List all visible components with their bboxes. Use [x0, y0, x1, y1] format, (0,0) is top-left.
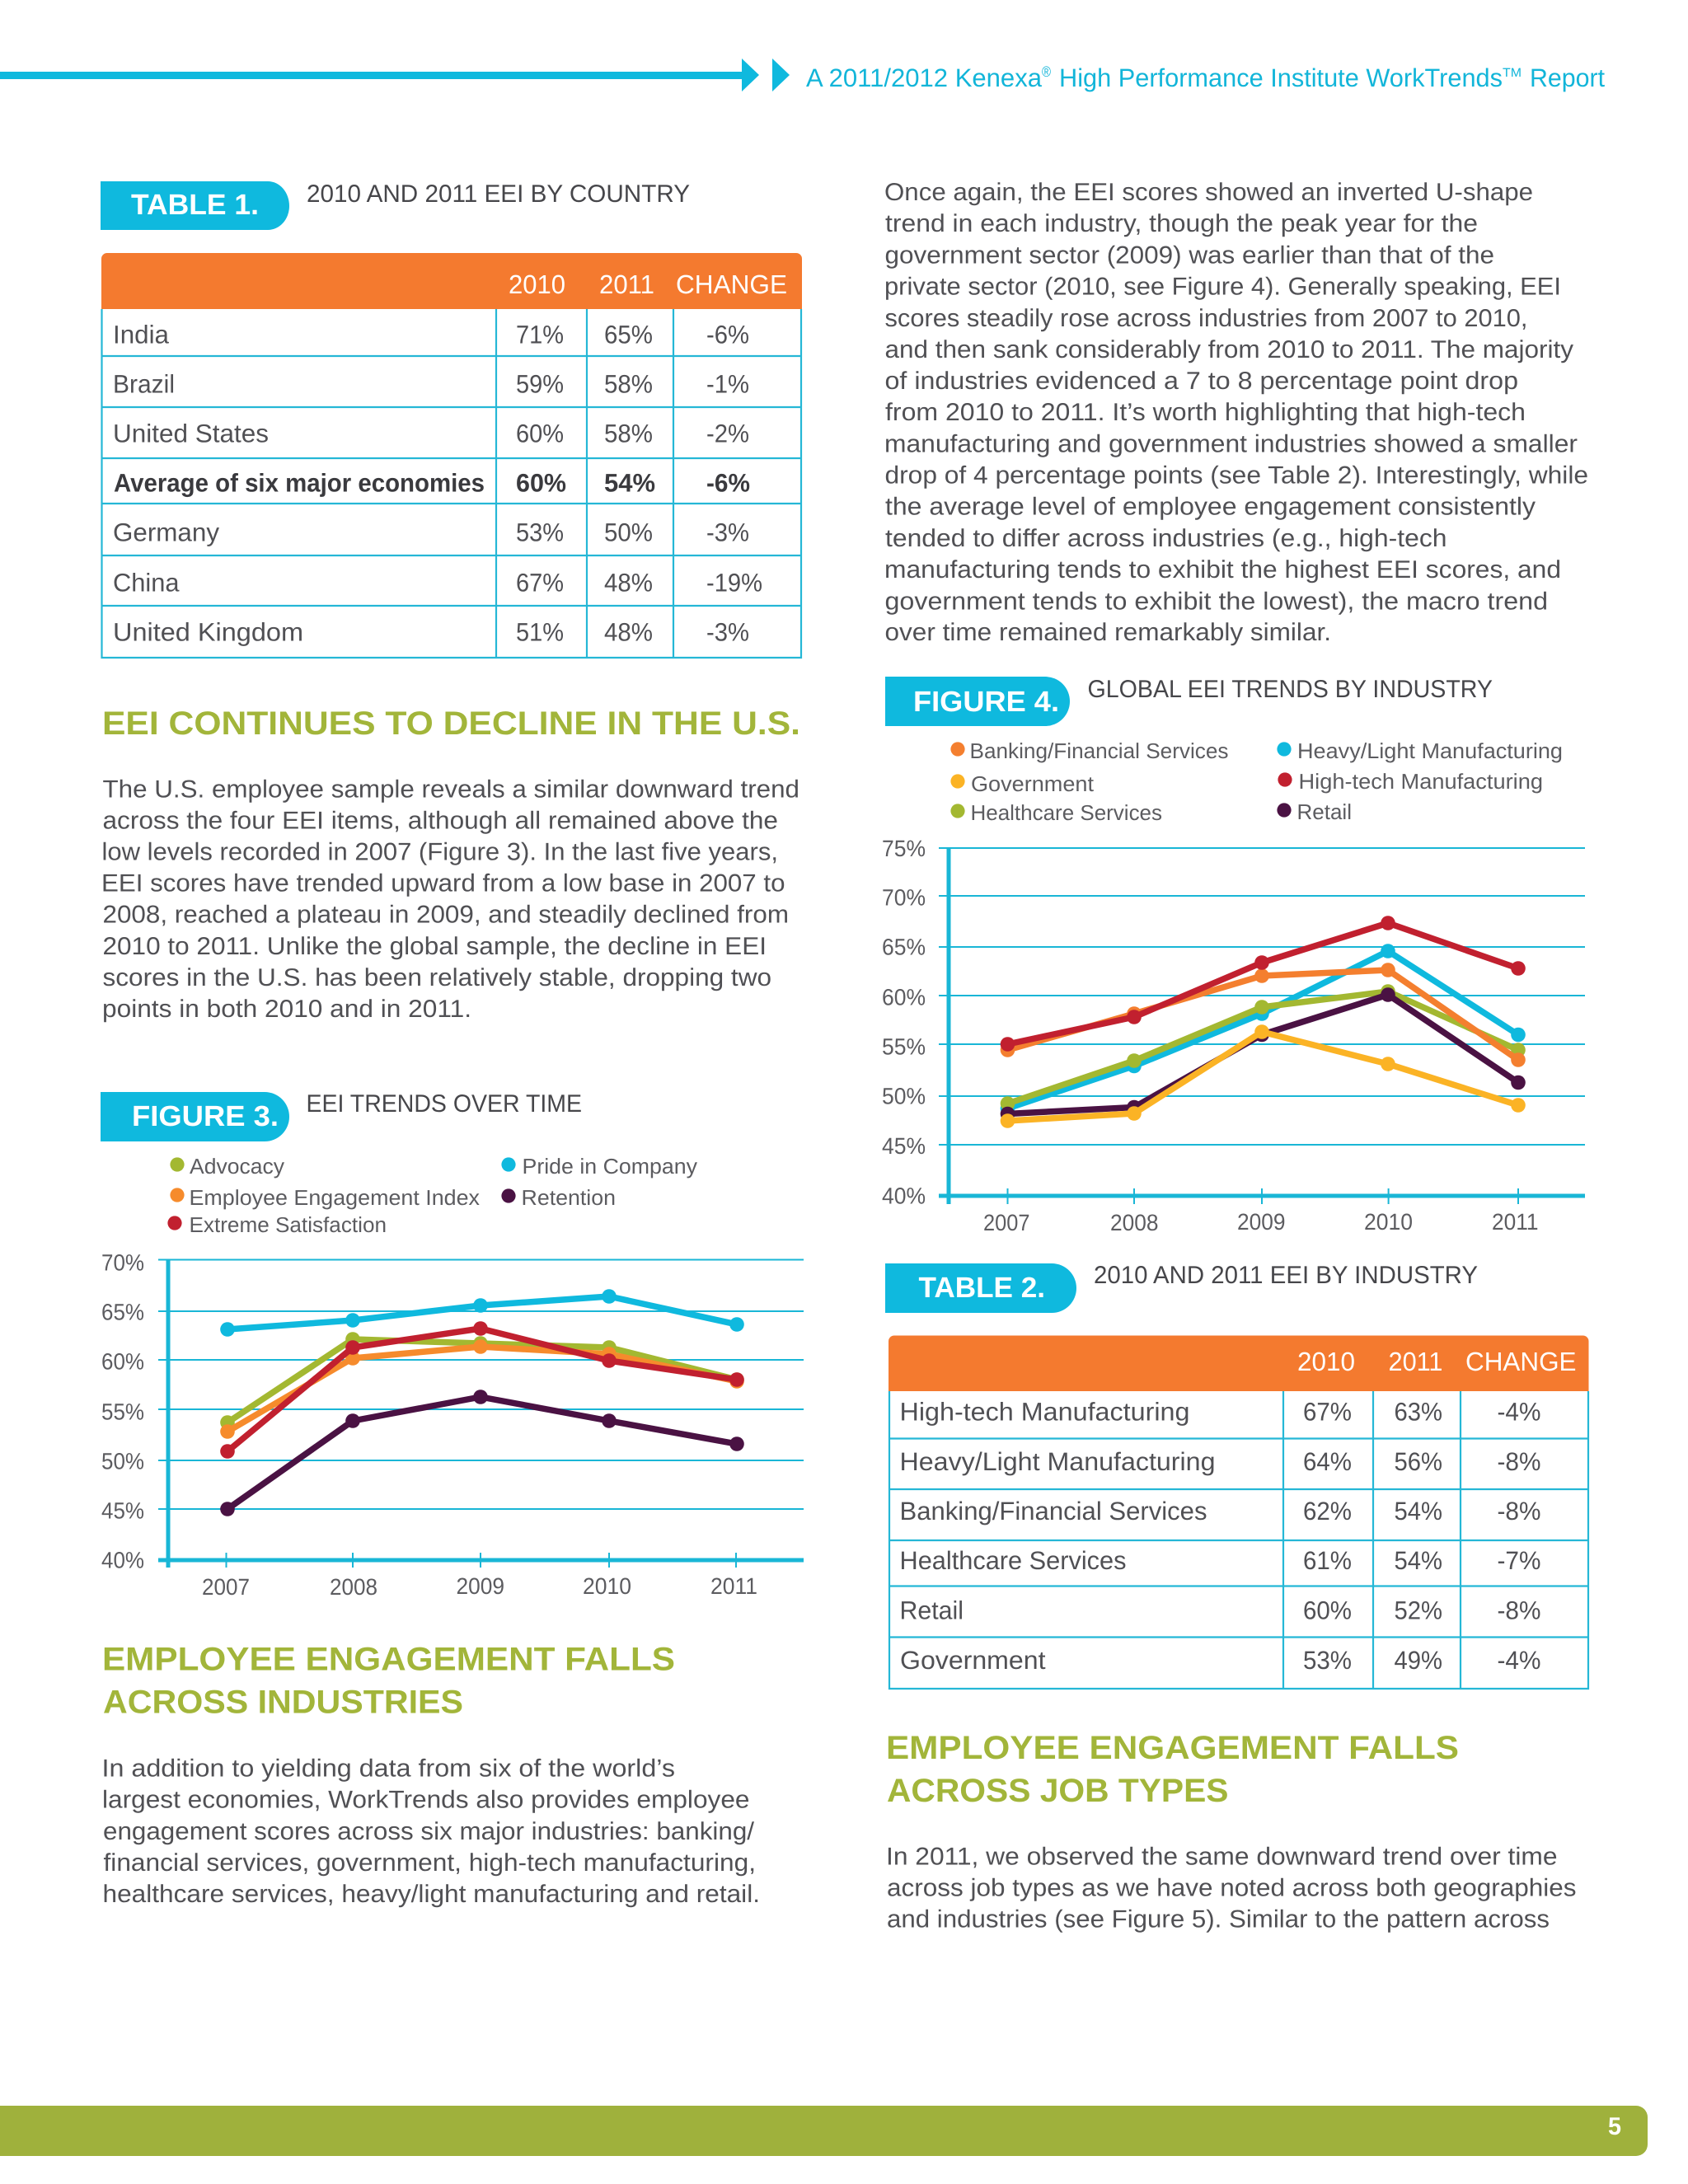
table 1 rows — [113, 320, 762, 646]
figure 4 badge — [885, 677, 1070, 726]
text block: inverted U-shape: government tends to exhibit the lowest), the macro trend — [885, 588, 1548, 615]
page number: 5 — [1608, 2113, 1621, 2140]
heading: falls across industries — [102, 1642, 675, 1721]
text block: U.S. sample: low levels recorded in 2007 (Figure 3). In the last five years, — [102, 839, 778, 865]
table 1 rows: United States — [113, 419, 269, 448]
table 1 rows: Average of six major economies — [114, 468, 485, 498]
figure 4 y axis labels: 75% — [882, 836, 926, 861]
table 1 rows: 71% — [516, 320, 564, 349]
table 2 rows: 49% — [1395, 1646, 1442, 1675]
figure 4 y axis labels: 45% — [882, 1133, 926, 1159]
text block: inverted U-shape: trend in each industry, though the peak year for the — [885, 210, 1478, 237]
figure 4 y axis labels: 70% — [882, 885, 926, 910]
series: Extreme Satisfaction — [220, 1321, 744, 1459]
figure 4 legend — [950, 738, 1563, 825]
table 1 badge: TABLE 1. — [131, 189, 259, 221]
table 1 rows: 50% — [604, 518, 653, 547]
table 2 rows: 62% — [1303, 1497, 1352, 1526]
figure 4 legend: Healthcare Services — [971, 800, 1162, 825]
series: Healthcare Services — [1001, 984, 1526, 1111]
table 2 grid — [889, 1391, 1588, 1689]
figure 3 badge — [101, 1092, 289, 1141]
table 2 rows: -8% — [1497, 1497, 1541, 1526]
figure 4 y axis labels: 60% — [882, 984, 926, 1010]
text block: inverted U-shape: Once again, the EEI scores showed an inverted U-shape — [884, 179, 1533, 206]
figure 3 legend: Retention — [521, 1185, 616, 1210]
table 1 grid — [102, 309, 801, 658]
text block: inverted U-shape: government sector (2009) was earlier than that of the — [885, 242, 1494, 269]
text block: industries: engagement scores across six major industries: banking/ — [103, 1818, 755, 1845]
header arrow bar — [0, 59, 790, 91]
text block: U.S. sample — [101, 776, 799, 1023]
line chart series: figure 3 — [220, 1289, 744, 1516]
table 1 rows: -3% — [706, 618, 749, 646]
figure 4 x axis labels: 2011 — [1492, 1209, 1538, 1235]
figure 4 legend: Retail — [1297, 799, 1352, 824]
table 2 rows: -8% — [1497, 1596, 1541, 1625]
text block: U.S. sample: scores in the U.S. has been relatively stable, dropping two — [102, 964, 771, 991]
table 1 rows: 60% — [516, 419, 564, 448]
figure 4 y axis labels: 65% — [882, 935, 926, 959]
table 2 rows: 63% — [1395, 1398, 1442, 1426]
panel: figure 3 — [101, 1090, 804, 1600]
figure 3 badge: FIGURE 3. — [132, 1100, 279, 1132]
series: Heavy/Light Manufacturing — [1001, 944, 1526, 1116]
figure 3 axes and grid — [158, 1259, 804, 1568]
report title: Report — [1530, 63, 1605, 92]
table 2 rows: 52% — [1395, 1596, 1442, 1625]
panel: table 2 — [885, 1262, 1589, 1689]
figure 4 y axis labels — [882, 836, 926, 1208]
table 1 rows: 48% — [604, 618, 653, 646]
table 2 rows: Heavy/Light Manufacturing — [900, 1447, 1215, 1476]
table 2 rows — [900, 1398, 1541, 1675]
table 2 badge — [885, 1263, 1076, 1313]
report title: TM — [1503, 66, 1522, 80]
series: Employee Engagement Index — [220, 1339, 744, 1439]
table 1 rows: 53% — [516, 518, 564, 547]
text block: U.S. sample: 2008, reached a plateau in 2009, and steadily declined from — [102, 902, 789, 928]
table 2 rows: -8% — [1497, 1447, 1541, 1476]
table 2 rows: 56% — [1395, 1447, 1442, 1476]
table 2 rows: Banking/Financial Services — [900, 1497, 1207, 1526]
figure 4 badge: FIGURE 4. — [913, 686, 1059, 718]
table 2 header row — [889, 1335, 1589, 1391]
table 1 rows: -6% — [706, 320, 749, 349]
text block: inverted U-shape: private sector (2010, see Figure 4). Generally speaking, EEI — [884, 274, 1561, 300]
table 2 rows: 64% — [1303, 1447, 1352, 1476]
series: Retention — [220, 1390, 744, 1516]
figure 4 legend: Banking/Financial Services — [969, 738, 1228, 763]
figure 3 legend: Advocacy — [190, 1154, 284, 1179]
figure 3 x axis labels: 2010 — [583, 1573, 631, 1599]
figure 4 y axis labels: 40% — [882, 1183, 926, 1208]
report title: High Performance Institute WorkTrends — [1059, 63, 1503, 92]
series: Advocacy — [220, 1332, 744, 1430]
text block: U.S. sample: points in both 2010 and in 2011. — [102, 996, 471, 1023]
panel: figure 4 — [882, 676, 1585, 1235]
heading: falls across job types — [886, 1730, 1459, 1809]
table 2 title: 2010 AND 2011 EEI BY INDUSTRY — [1094, 1262, 1478, 1289]
table 2 rows: Retail — [900, 1596, 964, 1625]
table 1 header row: 2011 — [599, 269, 654, 299]
table 1 rows: 59% — [516, 369, 564, 399]
figure 4 title: GLOBAL EEI TRENDS BY INDUSTRY — [1088, 676, 1493, 703]
table 2 rows: 61% — [1303, 1546, 1352, 1575]
table 1 badge — [101, 181, 289, 230]
figure 4 legend: Heavy/Light Manufacturing — [1297, 738, 1563, 763]
table 1 header row: CHANGE — [676, 269, 787, 299]
table 1 header row: 2010 — [509, 269, 565, 299]
table 2 rows: High-tech Manufacturing — [900, 1398, 1190, 1426]
figure 3 y axis labels: 40% — [101, 1548, 144, 1572]
heading: falls across industries: EMPLOYEE ENGAGEMENT FALLS — [102, 1642, 675, 1678]
text block: inverted U-shape — [884, 179, 1588, 646]
figure 3 x axis labels: 2008 — [330, 1574, 377, 1600]
series: Pride in Company — [220, 1289, 744, 1337]
text block: U.S. sample: The U.S. employee sample reveals a similar downward trend — [102, 776, 799, 803]
figure 4 axes and grid — [939, 848, 1585, 1204]
figure 3 legend — [167, 1154, 697, 1237]
panel: table 1 — [101, 180, 802, 658]
text block: industries: In addition to yielding data from six of the world’s — [102, 1755, 675, 1782]
text block: inverted U-shape: scores steadily rose across industries from 2007 to 2010, — [885, 305, 1528, 332]
table 1 rows: Brazil — [113, 369, 175, 399]
table 1 rows: 67% — [516, 569, 564, 597]
table 2 rows: -7% — [1497, 1546, 1541, 1575]
text block: industries — [102, 1755, 760, 1908]
table 2 rows: -4% — [1497, 1398, 1541, 1426]
table 2 rows: Government — [900, 1646, 1046, 1675]
figure 4 x axis labels: 2008 — [1110, 1210, 1159, 1235]
table 1 header row — [101, 253, 802, 309]
figure 3 title: EEI TRENDS OVER TIME — [307, 1090, 582, 1118]
table 1 rows: 65% — [604, 320, 653, 349]
table 1 rows: United Kingdom — [113, 618, 303, 646]
table 1 rows: 60% — [516, 468, 566, 498]
text block: inverted U-shape: over time remained remarkably similar. — [885, 619, 1331, 646]
text block: inverted U-shape: tended to differ across industries (e.g., high-tech — [885, 525, 1447, 552]
figure 4 y axis labels: 55% — [882, 1033, 926, 1060]
heading: EEI continues to decline: EEI CONTINUES TO DECLINE IN THE U.S. — [102, 705, 800, 742]
figure 3 y axis labels — [101, 1249, 144, 1572]
figure 4 x axis labels: 2010 — [1364, 1209, 1413, 1235]
table 1 rows: -3% — [706, 518, 749, 547]
line chart series: figure 4 — [1001, 916, 1526, 1128]
text block: industries: financial services, government, high-tech manufacturing, — [104, 1849, 756, 1877]
text block: industries: largest economies, WorkTrends also provides employee — [102, 1787, 750, 1813]
figure 3 y axis labels: 50% — [101, 1449, 144, 1474]
table 2 rows: 53% — [1303, 1646, 1352, 1675]
table 1 rows: 54% — [604, 468, 655, 498]
table 2 rows: 54% — [1395, 1546, 1442, 1575]
figure 3 x axis labels: 2011 — [710, 1573, 757, 1599]
text block: inverted U-shape: and then sank considerably from 2010 to 2011. The majority — [885, 336, 1573, 363]
table 2 badge: TABLE 2. — [918, 1272, 1045, 1304]
figure 4 x axis labels — [983, 1209, 1538, 1235]
report title — [806, 63, 1605, 92]
table 1 rows: -6% — [706, 468, 750, 498]
text block: U.S. sample: EEI scores have trended upward from a low base in 2007 to — [101, 870, 785, 897]
figure 4 legend: Government — [971, 771, 1095, 796]
figure 3 y axis labels: 65% — [101, 1299, 144, 1325]
table 1 rows: Germany — [113, 518, 220, 547]
text block: inverted U-shape: of industries evidenced a 7 to 8 percentage point drop — [885, 368, 1518, 395]
figure 4 legend: High-tech Manufacturing — [1299, 769, 1543, 794]
table 1 rows: India — [113, 320, 170, 349]
figure 3 x axis labels — [202, 1573, 757, 1600]
figure 4 x axis labels: 2007 — [983, 1210, 1030, 1235]
table 2 rows: 60% — [1303, 1596, 1352, 1625]
series: Retail — [1001, 987, 1526, 1121]
figure 3 x axis labels: 2009 — [457, 1573, 504, 1599]
footer bar — [0, 2106, 1648, 2156]
text block: inverted U-shape: manufacturing tends to exhibit the highest EEI scores, and — [884, 556, 1561, 583]
table 1 title: 2010 AND 2011 EEI BY COUNTRY — [307, 180, 690, 208]
table 2 rows: 54% — [1395, 1497, 1442, 1526]
text block: job types: across job types as we have noted across both geographies — [887, 1874, 1576, 1902]
figure 3 legend: Employee Engagement Index — [190, 1185, 480, 1210]
table 2 header row: 2011 — [1388, 1347, 1442, 1376]
text block: job types: In 2011, we observed the same downward trend over time — [886, 1843, 1558, 1871]
series: Government — [1001, 1024, 1526, 1128]
figure 4 y axis labels: 50% — [882, 1083, 926, 1109]
text block: inverted U-shape: manufacturing and government industries showed a smaller — [884, 430, 1578, 458]
text block: job types — [886, 1843, 1576, 1933]
text block: U.S. sample: across the four EEI items, although all remained above the — [102, 808, 778, 834]
figure 3 y axis labels: 60% — [101, 1348, 144, 1375]
text block: industries: healthcare services, heavy/light manufacturing and retail. — [102, 1881, 760, 1908]
figure 3 x axis labels: 2007 — [202, 1574, 250, 1600]
text block: inverted U-shape: drop of 4 percentage points (see Table 2). Interestingly, while — [885, 462, 1588, 490]
figure 3 legend: Pride in Company — [523, 1154, 697, 1179]
text block: inverted U-shape: from 2010 to 2011. It’s worth highlighting that high-tech — [885, 399, 1526, 426]
heading: falls across job types: EMPLOYEE ENGAGEMENT FALLS — [886, 1730, 1459, 1766]
series: High-tech Manufacturing — [1001, 916, 1526, 1052]
heading: falls across industries: ACROSS INDUSTRIES — [103, 1685, 463, 1721]
table 2 rows: 67% — [1303, 1398, 1352, 1426]
table 1 rows: 51% — [516, 618, 564, 646]
table 2 rows: -4% — [1497, 1646, 1541, 1675]
heading: falls across job types: ACROSS JOB TYPES — [887, 1773, 1228, 1809]
text block: U.S. sample: 2010 to 2011. Unlike the global sample, the decline in EEI — [102, 933, 767, 960]
text block: inverted U-shape: the average level of employee engagement consistently — [885, 493, 1536, 521]
table 1 rows: 48% — [604, 569, 653, 597]
report title: A 2011/2012 Kenexa — [806, 63, 1043, 92]
figure 3 y axis labels: 55% — [101, 1399, 144, 1424]
table 1 rows: -1% — [706, 369, 749, 399]
table 1 rows: 58% — [604, 369, 653, 399]
table 1 rows: -2% — [706, 419, 749, 448]
table 2 rows: Healthcare Services — [900, 1546, 1126, 1575]
table 2 header row: CHANGE — [1465, 1347, 1576, 1376]
report title: ® — [1042, 63, 1051, 80]
series: Banking/Financial Services — [1001, 963, 1526, 1067]
figure 3 y axis labels: 45% — [101, 1498, 144, 1523]
figure 3 legend: Extreme Satisfaction — [190, 1212, 387, 1237]
table 1 rows: -19% — [706, 569, 762, 597]
figure 3 y axis labels: 70% — [101, 1249, 144, 1276]
text block: job types: and industries (see Figure 5). Similar to the pattern across — [887, 1905, 1550, 1933]
table 1 rows: China — [113, 569, 180, 597]
figure 4 x axis labels: 2009 — [1237, 1209, 1286, 1235]
table 2 header row: 2010 — [1297, 1347, 1355, 1376]
table 1 rows: 58% — [604, 419, 653, 448]
